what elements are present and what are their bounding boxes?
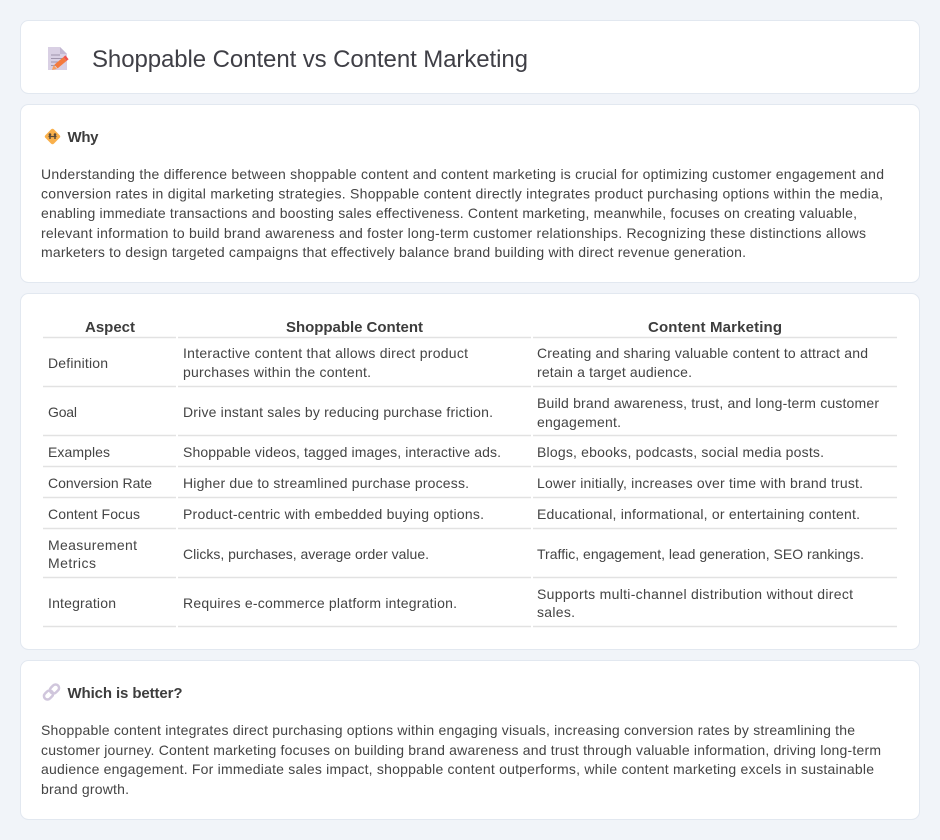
table header xyxy=(85,319,782,336)
icon: chain link xyxy=(42,683,61,701)
row: measurement metrics: Clicks, purchases, average order value. xyxy=(183,546,429,562)
panel: why xyxy=(20,104,920,282)
row: measurement metrics: Traffic, engagement, lead generation, SEO rankings. xyxy=(537,546,864,562)
row: examples xyxy=(48,444,824,460)
row: measurement metrics: Measurement xyxy=(48,537,137,553)
row: content focus: Content Focus xyxy=(48,506,140,522)
row: integration: Integration xyxy=(48,595,116,611)
row: conversion rate: Conversion Rate xyxy=(48,475,152,491)
row: content focus: Product-centric with embedded buying options. xyxy=(183,506,484,522)
row: definition: purchases within the content. xyxy=(183,364,371,380)
text block: why paragraph xyxy=(41,166,884,260)
row: conversion rate: Lower initially, increases over time with brand trust. xyxy=(537,475,863,491)
text block: which is better paragraph xyxy=(41,722,881,797)
row: examples: Shoppable videos, tagged images, interactive ads. xyxy=(183,444,501,460)
row: definition xyxy=(48,345,868,380)
table header: Aspect xyxy=(85,319,135,336)
row: conversion rate xyxy=(48,475,863,491)
row: goal xyxy=(48,395,879,430)
row: measurement metrics xyxy=(48,537,864,571)
row: conversion rate: Higher due to streamlined purchase process. xyxy=(183,475,469,491)
icon: warning diamond xyxy=(44,128,61,145)
row: definition: retain a target audience. xyxy=(537,364,692,380)
row: goal: Drive instant sales by reducing purchase friction. xyxy=(183,404,493,420)
title: Shoppable Content vs Content Marketing xyxy=(92,46,528,73)
row: goal: Build brand awareness, trust, and long-term customer xyxy=(537,395,879,411)
row: content focus xyxy=(48,506,860,522)
text block: which is better paragraph: audience engagement. For immediate sales impact, shoppable content outperforms, while content marketing excels in sustainable xyxy=(41,761,874,777)
text block: why paragraph: Understanding the difference between shoppable content and content marketing is crucial for optimizing customer engagement and xyxy=(41,166,884,182)
row: examples: Blogs, ebooks, podcasts, social media posts. xyxy=(537,444,824,460)
text block: why paragraph: marketers to design targeted campaigns that effectively balance brand building with direct revenue generation. xyxy=(41,244,746,260)
text block: which is better paragraph: Shoppable content integrates direct purchasing options within engaging visuals, increasing conversion rates by streamlining the xyxy=(41,722,855,738)
table header: Content Marketing xyxy=(648,319,782,336)
heading: which is better: Which is better? xyxy=(68,685,182,702)
text block: which is better paragraph: customer journey. Content marketing focuses on building brand awareness and trust through valuable information, driving long-term xyxy=(41,742,881,758)
row: definition: Definition xyxy=(48,355,108,371)
panel: title header xyxy=(20,20,920,94)
row: integration: sales. xyxy=(537,604,575,620)
row: definition: Interactive content that allows direct product xyxy=(183,345,468,361)
text block: why paragraph: conversion rates in digital marketing strategies. Shoppable content directly integrates product purchasing options within the media, xyxy=(41,186,883,202)
table header: Shoppable Content xyxy=(286,319,423,336)
text block: why paragraph: relevant information to build brand awareness and foster long-term customer relationships. Recognizing these distinctions allows xyxy=(41,225,866,241)
row: content focus: Educational, informational, or entertaining content. xyxy=(537,506,860,522)
row: integration: Supports multi-channel distribution without direct xyxy=(537,586,853,602)
text block: which is better paragraph: brand growth. xyxy=(41,781,129,797)
row: integration: Requires e-commerce platform integration. xyxy=(183,595,457,611)
icon: document with pencil xyxy=(48,47,67,70)
row: measurement metrics: Metrics xyxy=(48,555,96,571)
row: goal: Goal xyxy=(48,404,77,420)
row: examples: Examples xyxy=(48,444,110,460)
heading: why: Why xyxy=(68,129,99,146)
text block: why paragraph: enabling immediate transactions and boosting sales effectiveness. Content marketing, meanwhile, focuses on creating valuable, xyxy=(41,205,857,221)
panel: comparison table xyxy=(20,294,920,650)
row: definition: Creating and sharing valuable content to attract and xyxy=(537,345,868,361)
panel: which is better xyxy=(20,660,920,820)
row: goal: engagement. xyxy=(537,414,621,430)
row: integration xyxy=(48,586,853,620)
